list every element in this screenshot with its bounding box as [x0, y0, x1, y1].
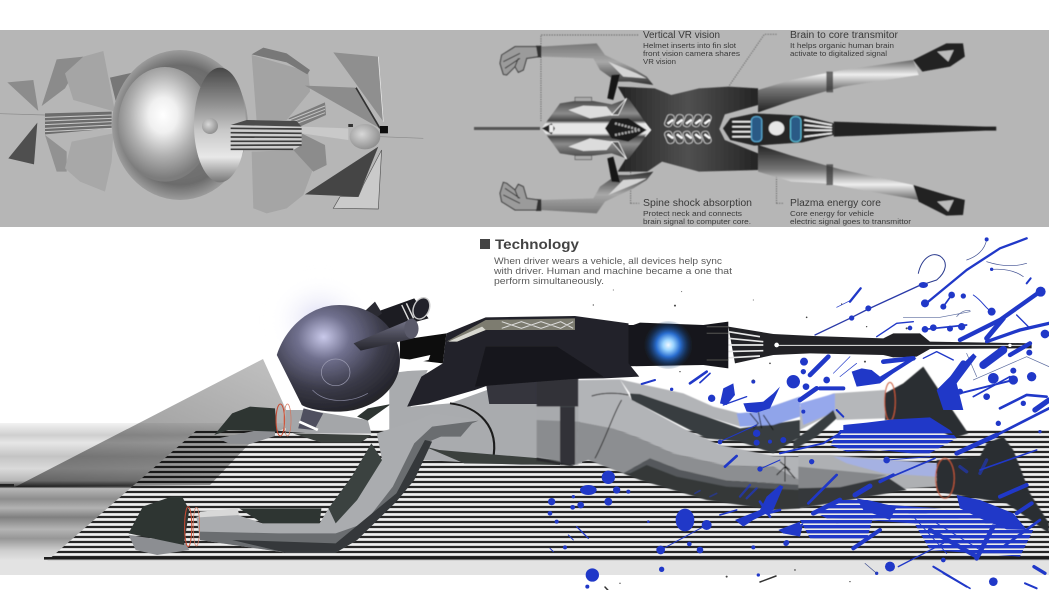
panel: exploded helmet view [0, 48, 423, 213]
label: Vertical VR vision: Vertical VR vision [643, 30, 720, 41]
sphere [112, 50, 248, 200]
label: Brain to core transmitor [790, 30, 899, 58]
legs and hips [537, 367, 1049, 533]
label: Brain to core transmitor: It helps organic human brain [790, 41, 894, 50]
helmet side [268, 295, 433, 430]
label: Brain to core transmitor: activate to digitalized signal [790, 49, 887, 58]
splatter: lower centre [548, 372, 800, 589]
vent slots [664, 114, 712, 144]
rear pole [474, 127, 540, 130]
torso pack [618, 87, 758, 172]
Technology body text [493, 256, 732, 287]
arm lower [500, 157, 653, 213]
blue paint splatter [548, 237, 1049, 590]
label: Vertical VR vision: VR vision [643, 57, 676, 66]
backpack hull [400, 316, 639, 407]
torso, legs and tail [541, 34, 996, 216]
label: Brain to core transmitor: Brain to core transmitor [790, 30, 899, 41]
leg lower [758, 145, 965, 216]
top grey band [0, 30, 1049, 227]
splatter: top right [800, 237, 1049, 410]
floor: stripe background [0, 423, 1049, 575]
calves and shoes [793, 367, 1049, 533]
near arm [129, 413, 560, 555]
paint flecks [593, 289, 908, 584]
label: Vertical VR vision [643, 30, 740, 66]
hips and thighs [537, 377, 800, 510]
arm upper [500, 43, 653, 100]
far arm [214, 404, 391, 444]
label: Plazma energy core [790, 198, 912, 226]
splatter: lower right [780, 408, 1049, 588]
label: Vertical VR vision: front vision camera shares [643, 49, 740, 58]
splatter: upper centre [767, 330, 790, 360]
helmet glow [272, 278, 368, 362]
label: Spine shock absorption: Protect neck and connects [643, 209, 742, 218]
plasma core [723, 113, 834, 146]
panel: top-down driver view [474, 34, 996, 216]
label: Plazma energy core: Core energy for vehicle [790, 209, 874, 218]
label: Plazma energy core: electric signal goes to transmittor [790, 217, 912, 226]
floor: black speed lines [47, 430, 1049, 561]
Technology heading: Technology [495, 237, 580, 252]
vision light cone [15, 359, 293, 487]
rear pack, tail and plasma core [268, 295, 1032, 430]
Technology body text: When driver wears a vehicle, all devices help sync [494, 256, 722, 267]
label: Spine shock absorption [643, 198, 752, 226]
leg upper [758, 43, 965, 112]
callout lines [541, 34, 783, 203]
helmet top view [542, 97, 651, 160]
body torso [389, 362, 582, 465]
label: Spine shock absorption: Spine shock absorption [643, 198, 752, 209]
Technology body text: with driver. Human and machine became a one that [493, 266, 732, 277]
tail [834, 122, 996, 137]
label: Spine shock absorption: brain signal to computer core. [643, 217, 751, 226]
label: Vertical VR vision: Helmet inserts into fin slot [643, 41, 737, 50]
tail boom [593, 321, 1032, 369]
ink slash [605, 576, 776, 590]
label: Plazma energy core: Plazma energy core [790, 198, 881, 209]
Technology body text: perform simultaneously. [494, 276, 604, 287]
